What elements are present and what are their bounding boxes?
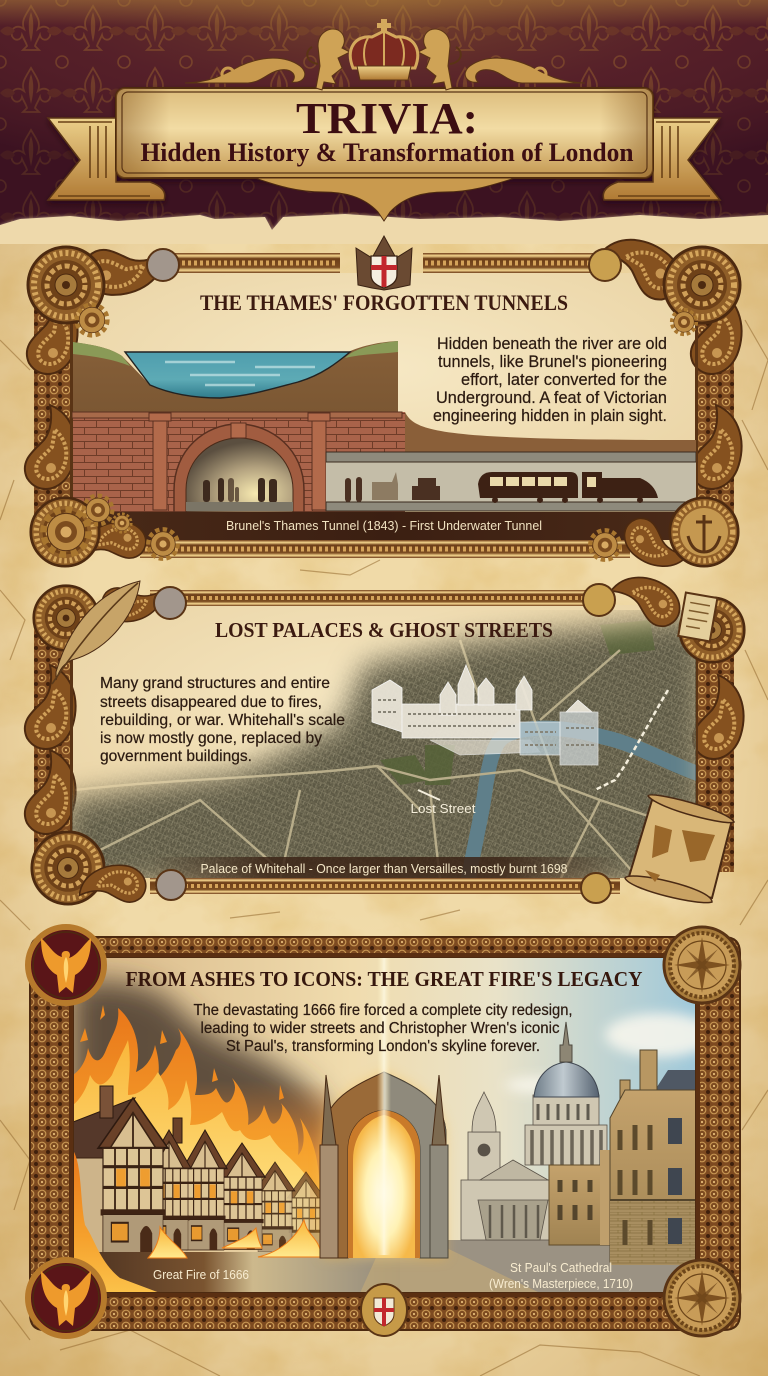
light ray [377,925,391,1255]
panel 1 corner mandalas [28,229,740,335]
bottom band [140,540,630,558]
medallion left [147,249,179,281]
train silhouette [478,472,658,503]
panel: great fire legacy [25,924,742,1339]
section title: LOST PALACES & GHOST STREETS [215,618,553,642]
paragraph: streets disappeared due to fires, [100,694,322,711]
flourish under banner [255,178,515,221]
parks [380,620,655,785]
flames back [73,1008,320,1240]
fire backdrop [195,1086,324,1250]
map illustration [60,610,710,890]
paragraph [433,334,667,425]
paragraph: St Paul's, transforming London's skyline forever. [226,1038,540,1055]
icon: phoenix bottom-left [28,1260,104,1336]
frame inner edge [71,955,698,1295]
paragraph: leading to wider streets and Christopher Wren's iconic [200,1020,560,1037]
portal glow [322,1072,446,1258]
cathedral dome [534,1062,599,1097]
panel 1 interior [72,273,696,513]
lost street label: Lost Street [410,801,476,816]
panel: Thames tunnels [25,229,742,575]
wall cornice [72,412,402,418]
icon: compass bottom-right [664,1260,740,1336]
ghost route [595,690,668,790]
caption bar [72,512,696,540]
icon: medallion left top [154,587,186,619]
icon: paper scroll [678,593,717,641]
clouds [505,1013,715,1093]
mid building [549,1150,611,1245]
icon: compass top-right [664,927,740,1003]
earth and river [73,341,696,456]
label: St Paul's [489,1260,633,1291]
panel 3 ornate frame [30,937,740,1330]
section title: THE THAMES' FORGOTTEN TUNNELS [200,290,568,315]
City of London crest [356,236,412,290]
right ground [400,1240,680,1292]
label: St Paul's: St Paul's Cathedral [510,1260,612,1275]
ribbon left tail [48,118,165,200]
large stone building [610,1090,696,1265]
flourish right [465,58,585,83]
icon: medallion right bottom [581,873,611,903]
brick arch tunnel [174,423,304,512]
map grit [60,610,710,890]
cathedral lantern [560,1022,572,1062]
flourish left [185,58,305,83]
caption bar [150,857,620,879]
paragraph: government buildings. [100,748,252,765]
panel 2 top band [150,590,600,606]
left roof of main house [73,1098,135,1158]
silhouettes and small engine [345,472,440,502]
main roads [75,640,690,880]
brick wall [73,412,405,512]
river [468,728,705,880]
foreground flames [73,1150,322,1293]
paragraph: engineering hidden in plain sight. [433,406,667,425]
gothic arch [320,1072,448,1258]
timber houses [73,1086,325,1254]
header: maroon damask backdrop [0,0,768,244]
tunnel cross-section illustration [72,341,696,512]
medallion right [589,249,621,281]
bottom-left gears [31,496,177,575]
paragraph: Many grand structures and entire [100,675,330,692]
bottom band [150,878,620,894]
label: St Paul's: (Wren's Masterpiece, 1710) [489,1276,633,1291]
caption: Brunel's Thames Tunnel (1843) - First Underwater Tunnel [226,518,542,533]
cathedral tower [468,1092,500,1190]
road to right [360,1249,538,1292]
panel: lost palaces [25,570,744,915]
smoke [73,981,341,1170]
panel 2 interior [72,605,696,878]
lost street marker [418,790,440,800]
icon: quill feather [52,581,140,684]
paragraph: tunnels, like Brunel's pioneering [438,352,667,371]
portal opening [353,1115,415,1258]
icon: medallion right top [583,584,615,616]
left street [99,1252,384,1292]
lion left [307,29,350,90]
crown [350,19,418,80]
title ribbon banner [48,88,720,200]
crest: crown and lions [185,19,585,90]
icon: phoenix top-left [28,927,104,1003]
embers [80,1005,284,1100]
panel 1 side ornaments [25,270,742,540]
label: Great Fire: Great Fire of 1666 [153,1267,249,1282]
paragraph: rebuilding, or war. Whitehall's scale [100,712,345,729]
St Paul's Cathedral [461,1022,696,1265]
columns [149,413,330,510]
sky [74,958,695,1252]
paragraph [100,675,345,765]
icon: treasure map scroll [625,795,734,903]
scene [74,958,695,1292]
paragraph: Underground. A feat of Victorian [436,388,667,407]
icon: medallion left bottom [156,870,186,900]
section title: FROM ASHES TO ICONS: THE GREAT FIRE'S LEGACY [126,967,642,991]
paragraph: effort, later converted for the [461,370,667,389]
corner ornaments [32,570,744,915]
slate roof [655,1070,696,1090]
palace ghost [372,665,598,765]
paragraph [194,1002,572,1055]
bottom-right anchor seal [591,498,738,575]
title text [140,94,634,167]
underground tunnel strip [326,452,696,511]
panel 2 side ornaments [25,610,744,878]
soft halo [0,905,768,1355]
title text: Hidden History & Transformation of London [140,138,634,167]
icon: bottom coat of arms seal [361,1284,407,1336]
map streets [60,610,710,890]
cathedral body [460,1160,548,1240]
panel 1 top band [165,253,595,273]
paragraph: The devastating 1666 fire forced a complete city redesign, [194,1002,572,1019]
ribbon main panel [116,88,653,178]
chimneys [620,1050,657,1108]
tunnel people silhouettes [186,478,293,511]
paragraph: is now mostly gone, replaced by [100,730,322,747]
title text: TRIVIA: [296,94,478,143]
cathedral drum [525,1095,607,1165]
caption: Palace of Whitehall - Once larger than Versailles, mostly burnt 1698 [200,861,568,876]
lion right [418,29,461,90]
paragraph: Hidden beneath the river are old [437,334,667,353]
ribbon right tail [603,118,720,200]
